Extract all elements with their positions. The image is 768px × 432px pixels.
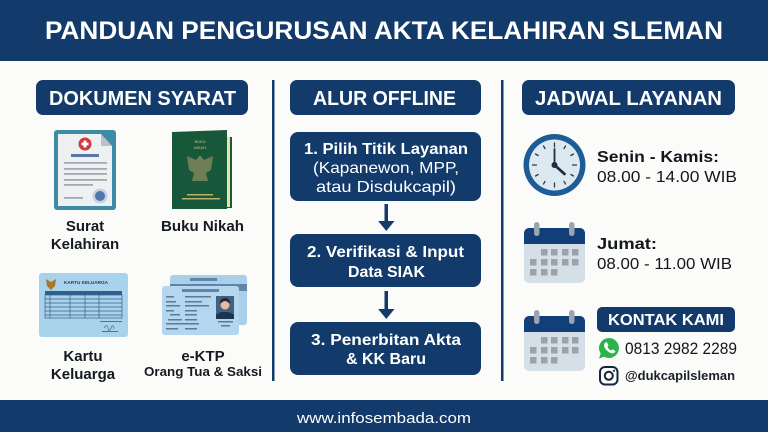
icon: instagram [600,367,618,384]
step 1: 1. Pilih Titik Layanan [304,141,468,158]
heading: kontak kami [597,307,735,332]
heading: jadwal layanan: JADWAL LAYANAN [535,88,722,110]
icon: kartu keluarga [39,273,128,337]
footer band with url [0,400,768,432]
icon: clock [524,134,586,196]
label: e-KTP orang tua dan saksi [144,348,262,379]
icon: whatsapp [599,338,619,358]
text: senin kamis: Senin - Kamis: [597,149,719,166]
icon: e-KTP cards [162,275,247,335]
icon: buku nikah [172,130,232,209]
header band with title: PANDUAN PENGURUSAN AKTA KELAHIRAN SLEMAN [45,17,723,45]
heading: kontak kami: KONTAK KAMI [608,312,724,329]
step 1: atau Disdukcapil) [316,179,456,196]
icon: surat kelahiran [54,130,116,210]
icon: calendar jumat [524,222,585,283]
arrow: step 1 to 2 [378,204,394,231]
icon: kartu keluarga: KARTU KELUARGA [64,280,109,285]
step 2 [290,234,481,287]
step 1: (Kapanewon, MPP, [313,160,459,177]
text: senin kamis: 08.00 - 14.00 WIB [597,169,737,186]
panel: jadwal layanan [522,80,737,384]
panel: alur offline [290,80,481,375]
heading: alur offline: ALUR OFFLINE [313,88,456,110]
text: phone number: 0813 2982 2289 [625,339,737,358]
panel: dokumen syarat [36,80,262,383]
label: buku nikah: Buku Nikah [161,218,244,235]
step 1 [290,132,481,201]
heading: dokumen syarat: DOKUMEN SYARAT [49,88,236,110]
label: kartu keluarga: Kartu [63,348,103,365]
text: instagram handle: @dukcapilsleman [625,368,735,383]
icon: buku nikah: NIKAH [194,145,206,150]
step 2: 2. Verifikasi & Input [307,244,465,261]
header band with title [0,0,768,61]
step 3 [290,322,481,375]
footer band with url: www.infosembada.com [296,410,471,427]
label: surat kelahiran: Surat [66,218,104,235]
text: jumat: Jumat: [597,236,657,253]
step 3: & KK Baru [346,351,426,368]
text: senin kamis [597,149,737,186]
heading: dokumen syarat [36,80,248,115]
text: jumat [597,236,732,273]
label: surat kelahiran: Kelahiran [51,236,119,253]
heading: jadwal layanan [522,80,735,115]
arrow: step 2 to 3 [378,291,394,319]
heading: alur offline [290,80,481,115]
label: kartu keluarga: Keluarga [51,366,116,383]
icon: calendar kontak [524,310,585,371]
label: e-KTP orang tua dan saksi: e-KTP [181,348,225,365]
step 2: Data SIAK [348,264,425,281]
icon: buku nikah: BUKU [194,139,206,144]
label: e-KTP orang tua dan saksi: Orang Tua & Saksi [144,365,262,379]
text: jumat: 08.00 - 11.00 WIB [597,256,732,273]
step 3: 3. Penerbitan Akta [311,332,461,349]
